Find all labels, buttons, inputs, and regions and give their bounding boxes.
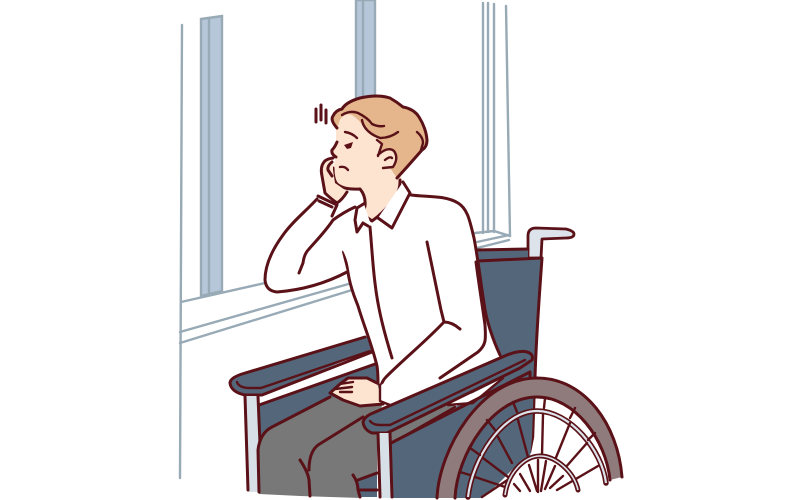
hub spokes <box>514 460 563 492</box>
collar <box>355 182 410 232</box>
resting hand <box>330 378 383 406</box>
ear <box>381 150 396 175</box>
right chair post <box>378 372 530 498</box>
neck and face <box>332 112 402 222</box>
hair <box>332 96 427 178</box>
eye, brow and mouth <box>340 132 357 170</box>
face outline <box>332 142 400 221</box>
shirt cuff <box>380 380 399 405</box>
left chair post <box>245 396 262 492</box>
short spokes <box>460 398 595 475</box>
trousers <box>258 378 503 498</box>
left armrest <box>230 336 375 395</box>
long spokes <box>475 414 598 497</box>
wheelchair back and handle <box>470 228 574 452</box>
right armrest <box>363 351 532 433</box>
raised arm <box>265 198 355 292</box>
worry marks <box>316 105 326 123</box>
shirt torso <box>342 186 501 408</box>
tyre <box>437 378 622 498</box>
wheel <box>437 378 622 498</box>
wheelchair seat panel <box>240 343 534 498</box>
hub ring <box>505 456 578 495</box>
head <box>316 96 427 222</box>
window frame <box>180 0 510 478</box>
hand at cheek <box>318 158 348 216</box>
metal rim <box>468 411 606 497</box>
